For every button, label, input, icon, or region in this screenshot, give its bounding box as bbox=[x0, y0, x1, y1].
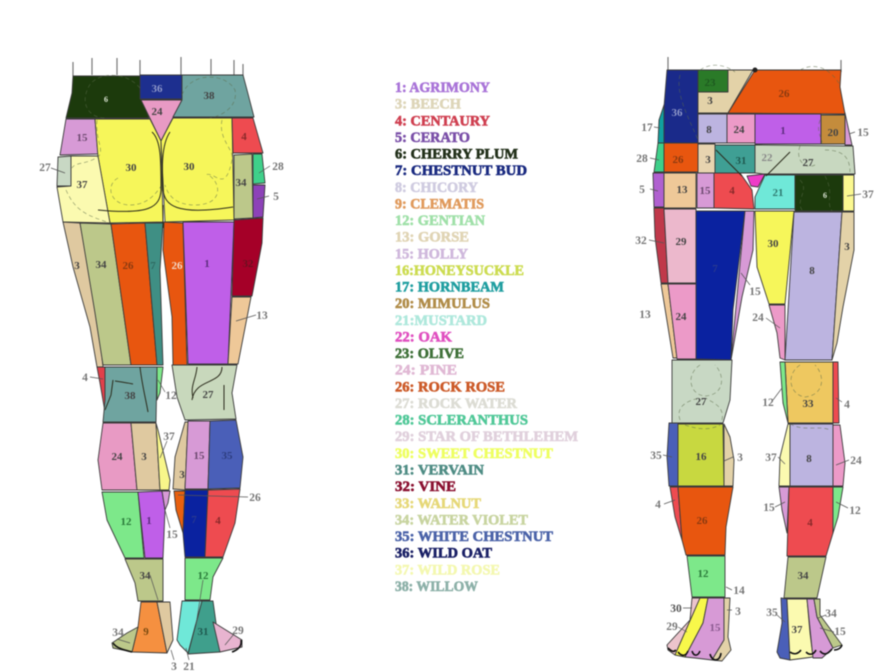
left figure number labels: 35 bbox=[222, 450, 233, 462]
left figure number labels: 9 bbox=[143, 626, 149, 638]
left figure number labels: 26 bbox=[249, 492, 261, 504]
right figure number labels: 7 bbox=[712, 263, 718, 275]
left figure number labels: 29 bbox=[232, 625, 244, 637]
right foot zones of right figure bbox=[777, 598, 842, 660]
right figure number labels: 32 bbox=[635, 235, 647, 247]
right figure number labels: 12 bbox=[762, 397, 774, 409]
left figure number labels: 4 bbox=[82, 372, 88, 384]
right figure number labels: 13 bbox=[676, 184, 688, 196]
legend: numbered list of remedies: 24: PINE bbox=[395, 363, 457, 379]
right figure number labels: 15 bbox=[834, 626, 846, 638]
left figure leader lines bbox=[51, 166, 270, 660]
left figure number labels: 7 bbox=[191, 514, 197, 526]
right figure number labels: 8 bbox=[706, 124, 712, 136]
right figure number labels: 23 bbox=[704, 77, 716, 89]
waist tick marks bbox=[73, 57, 243, 76]
left figure number labels: 36 bbox=[152, 83, 163, 95]
toes and dashed guide lines of right figure bbox=[668, 65, 850, 660]
right figure number labels: 8 bbox=[806, 453, 812, 465]
left figure number labels: 37 bbox=[163, 431, 175, 443]
left figure number labels: 30 bbox=[184, 161, 195, 173]
left figure number labels: 5 bbox=[273, 191, 279, 203]
right figure number labels: 17 bbox=[641, 122, 653, 134]
left figure number labels: 34 bbox=[112, 627, 124, 639]
legend: numbered list of remedies: 34: WATER VIOLET bbox=[395, 512, 528, 528]
legend: numbered list of remedies: 3: BEECH bbox=[395, 97, 462, 113]
left figure number labels: 24 bbox=[152, 106, 163, 118]
right figure number labels: 4 bbox=[655, 499, 661, 511]
right figure number labels: 33 bbox=[802, 398, 814, 410]
left figure number labels: 37 bbox=[76, 179, 88, 191]
legend: numbered list of remedies: 16:HONEYSUCKLE bbox=[395, 263, 524, 279]
right figure number labels: 27 bbox=[696, 396, 707, 408]
right figure number labels: 31 bbox=[736, 155, 746, 167]
right figure number labels: 15 bbox=[700, 185, 711, 197]
legend: numbered list of remedies: 35: WHITE CHESTNUT bbox=[395, 529, 553, 545]
legend: numbered list of remedies: 37: WILD ROSE bbox=[395, 562, 500, 578]
right figure leader lines bbox=[649, 127, 861, 632]
left figure number labels: 26 bbox=[172, 260, 183, 272]
left figure number labels: 1 bbox=[146, 515, 152, 527]
left figure number labels: 15 bbox=[76, 132, 88, 144]
legend: numbered list of remedies: 12: GENTIAN bbox=[395, 213, 486, 229]
right figure number labels: 36 bbox=[672, 107, 683, 119]
legend: numbered list of remedies: 26: ROCK ROSE bbox=[395, 379, 505, 395]
left figure number labels: 24 bbox=[112, 451, 123, 463]
left figure number labels: 38 bbox=[204, 90, 215, 102]
right figure number labels: 30 bbox=[768, 238, 779, 250]
right figure number labels: 15 bbox=[763, 502, 775, 514]
waist tick marks bbox=[668, 57, 841, 72]
right figure number labels: 3 bbox=[844, 241, 850, 253]
left figure number labels: 34 bbox=[96, 259, 107, 271]
right figure number labels: 34 bbox=[798, 570, 809, 582]
right figure number labels: 4 bbox=[844, 399, 850, 411]
lower zones of right figure bbox=[667, 360, 845, 598]
left figure number labels: 4 bbox=[241, 131, 247, 143]
left figure number labels: 3 bbox=[74, 260, 80, 272]
left figure number labels: 27 bbox=[39, 162, 51, 174]
legend: numbered list of remedies: 21:MUSTARD bbox=[395, 313, 487, 329]
left figure number labels: 4 bbox=[215, 515, 221, 527]
right figure number labels: 20 bbox=[828, 127, 839, 139]
legend: numbered list of remedies: 23: OLIVE bbox=[395, 346, 464, 362]
left figure number labels: 26 bbox=[122, 260, 134, 272]
left figure number labels: 12 bbox=[120, 516, 132, 528]
left figure number labels: 15 bbox=[166, 529, 178, 541]
right figure number labels: 4 bbox=[807, 517, 813, 529]
left figure number labels: 13 bbox=[256, 310, 268, 322]
legend: numbered list of remedies: 29: STAR OF BETHLEHEM bbox=[395, 429, 578, 445]
legend: numbered list of remedies: 1: AGRIMONY bbox=[395, 80, 490, 96]
right figure number labels: 26 bbox=[778, 88, 790, 100]
right figure number labels: 28 bbox=[636, 153, 648, 165]
right figure number labels: 3 bbox=[737, 452, 743, 464]
left figure number labels: 3 bbox=[141, 451, 147, 463]
legend: numbered list of remedies: 7: CHESTNUT BUD bbox=[395, 163, 527, 179]
right figure number labels: 14 bbox=[733, 585, 745, 597]
legend: numbered list of remedies: 27: ROCK WATER bbox=[395, 396, 518, 412]
legend: numbered list of remedies: 22: OAK bbox=[395, 330, 453, 346]
right figure number labels bbox=[635, 77, 874, 638]
legend: numbered list of remedies: 13: GORSE bbox=[395, 230, 469, 246]
left figure number labels: 6 bbox=[104, 95, 108, 104]
left figure: back of legs with numbered zones bbox=[39, 57, 284, 672]
legend: numbered list of remedies: 30: SWEET CHESTNUT bbox=[395, 446, 553, 462]
right figure number labels: 12 bbox=[698, 568, 709, 580]
legend: numbered list of remedies: 8: CHICORY bbox=[395, 180, 479, 196]
right figure number labels: 34 bbox=[825, 608, 837, 620]
right figure number labels: 27 bbox=[802, 157, 814, 169]
right figure number labels: 35 bbox=[650, 450, 662, 462]
creases and dashed guide lines of left figure bbox=[66, 75, 241, 652]
legend: numbered list of remedies: 5: CERATO bbox=[395, 130, 470, 146]
left figure number labels: 1 bbox=[204, 258, 210, 270]
right figure number labels: 26 bbox=[696, 515, 708, 527]
left foot zones of right figure bbox=[667, 598, 731, 661]
legend: numbered list of remedies: 33: WALNUT bbox=[395, 496, 481, 512]
legend: numbered list of remedies: 17: HORNBEAM bbox=[395, 280, 504, 296]
right figure number labels: 24 bbox=[850, 455, 862, 467]
right figure number labels: 4 bbox=[729, 185, 735, 197]
left figure number labels: 34 bbox=[236, 177, 247, 189]
left figure number labels: 12 bbox=[198, 570, 209, 582]
right figure number labels: 5 bbox=[639, 184, 645, 196]
legend: numbered list of remedies: 32: VINE bbox=[395, 479, 456, 495]
right figure: front of legs with numbered zones bbox=[635, 57, 874, 661]
right figure number labels: 24 bbox=[734, 124, 745, 136]
right figure number labels: 15 bbox=[857, 127, 869, 139]
right figure number labels: 6 bbox=[823, 191, 827, 200]
legend: numbered list of remedies: 36: WILD OAT bbox=[395, 546, 492, 562]
left figure number labels: 32 bbox=[242, 258, 254, 270]
legend: numbered list of remedies: 6: CHERRY PLUM bbox=[395, 146, 518, 162]
right figure number labels: 12 bbox=[849, 505, 861, 517]
legend: numbered list of remedies: 4: CENTAURY bbox=[395, 113, 491, 129]
legend: numbered list of remedies: 28: SCLERANTHUS bbox=[395, 413, 528, 429]
right figure number labels: 22 bbox=[762, 152, 773, 164]
legend: numbered list of remedies: 31: VERVAIN bbox=[395, 462, 485, 478]
right figure number labels: 26 bbox=[672, 154, 684, 166]
right figure number labels: 3 bbox=[707, 95, 713, 107]
right figure number labels: 35 bbox=[766, 607, 778, 619]
right figure number labels: 3 bbox=[735, 606, 741, 618]
right figure number labels: 24 bbox=[752, 312, 764, 324]
legend: numbered list of remedies: 20: MIMULUS bbox=[395, 296, 490, 312]
right figure number labels: 21 bbox=[772, 187, 784, 199]
right figure number labels: 1 bbox=[780, 125, 786, 137]
left figure number labels: 7 bbox=[150, 260, 156, 272]
right figure number labels: 24 bbox=[676, 311, 687, 323]
right figure number labels: 37 bbox=[765, 452, 777, 464]
upper zones of left figure bbox=[57, 75, 265, 367]
left figure number labels: 38 bbox=[124, 390, 136, 402]
left figure number labels: 30 bbox=[126, 162, 137, 174]
left figure number labels: 3 bbox=[179, 469, 185, 481]
left figure number labels: 28 bbox=[272, 161, 284, 173]
right figure number labels: 16 bbox=[696, 451, 707, 463]
right figure number labels: 29 bbox=[676, 236, 687, 248]
legend: numbered list of remedies: 15: HOLLY bbox=[395, 246, 469, 262]
left figure number labels: 15 bbox=[194, 450, 205, 462]
left figure number labels bbox=[39, 83, 284, 672]
left figure number labels: 34 bbox=[140, 570, 151, 582]
right figure number labels: 15 bbox=[710, 622, 721, 634]
left figure number labels: 27 bbox=[202, 389, 214, 401]
right figure number labels: 37 bbox=[792, 624, 803, 636]
legend: numbered list of remedies: 9: CLEMATIS bbox=[395, 196, 484, 212]
left figure number labels: 12 bbox=[165, 390, 177, 402]
right figure number labels: 15 bbox=[749, 286, 761, 298]
upper zones of right figure bbox=[653, 70, 855, 360]
right figure number labels: 29 bbox=[666, 621, 678, 633]
right figure number labels: 30 bbox=[670, 603, 682, 615]
right figure number labels: 8 bbox=[809, 265, 815, 277]
lower zones of left figure bbox=[97, 365, 243, 654]
legend: numbered list of remedies: 38: WILLOW bbox=[395, 579, 478, 595]
legend: numbered list of remedies bbox=[395, 80, 578, 595]
right figure number labels: 37 bbox=[862, 189, 874, 201]
left figure number labels: 31 bbox=[198, 626, 208, 638]
right figure number labels: 13 bbox=[639, 309, 651, 321]
right figure number labels: 3 bbox=[705, 154, 711, 166]
